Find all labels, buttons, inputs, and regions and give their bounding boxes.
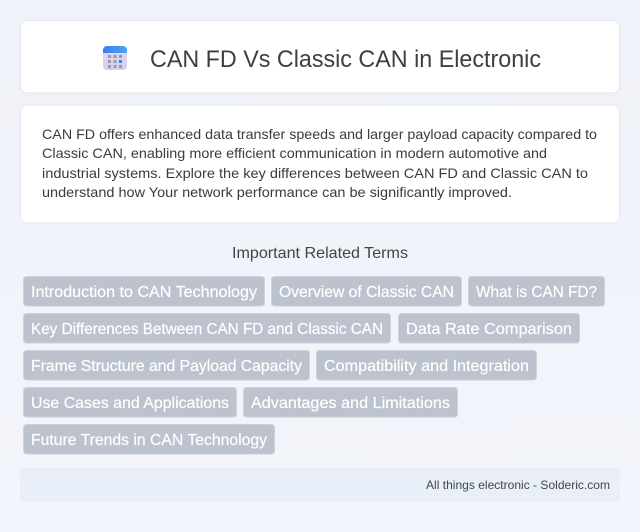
tag (468, 276, 604, 306)
tag: Overview of Classic CAN (279, 284, 454, 301)
footer bar (20, 468, 620, 502)
tag (24, 388, 236, 417)
tag: What is CAN FD? (476, 284, 597, 301)
tag (272, 276, 462, 306)
tag list (24, 276, 604, 454)
footer text: All things electronic - Solderic.com (426, 478, 610, 492)
tag: Frame Structure and Payload Capacity (31, 358, 302, 375)
tag (24, 424, 274, 454)
description text: understand how Your network performance can be significantly improved. (42, 184, 512, 200)
description text (42, 126, 597, 200)
tag (398, 314, 580, 343)
tag (244, 388, 458, 417)
heading: important related terms: Important Related Terms (232, 245, 408, 262)
tag: Data Rate Comparison (406, 321, 572, 338)
description text: Classic CAN, enabling more efficient communication in modern automotive and (42, 145, 547, 161)
description text: CAN FD offers enhanced data transfer speeds and larger payload capacity compared to (42, 126, 597, 142)
tag (24, 276, 264, 306)
panel: description (20, 105, 620, 223)
description text: industrial systems. Explore the key differences between CAN FD and Classic CAN to (42, 165, 588, 181)
tag: Future Trends in CAN Technology (31, 432, 267, 449)
title: CAN FD Vs Classic CAN in Electronic (150, 46, 541, 73)
tag: Introduction to CAN Technology (31, 284, 257, 301)
tag (24, 314, 390, 343)
header panel (20, 20, 620, 93)
tag (316, 350, 536, 380)
icon: calendar (103, 46, 127, 70)
tag (24, 350, 310, 380)
tag: Use Cases and Applications (31, 395, 229, 412)
tag: Compatibility and Integration (324, 358, 529, 375)
tag: Key Differences Between CAN FD and Classic CAN (31, 321, 383, 338)
tag: Advantages and Limitations (251, 395, 450, 412)
